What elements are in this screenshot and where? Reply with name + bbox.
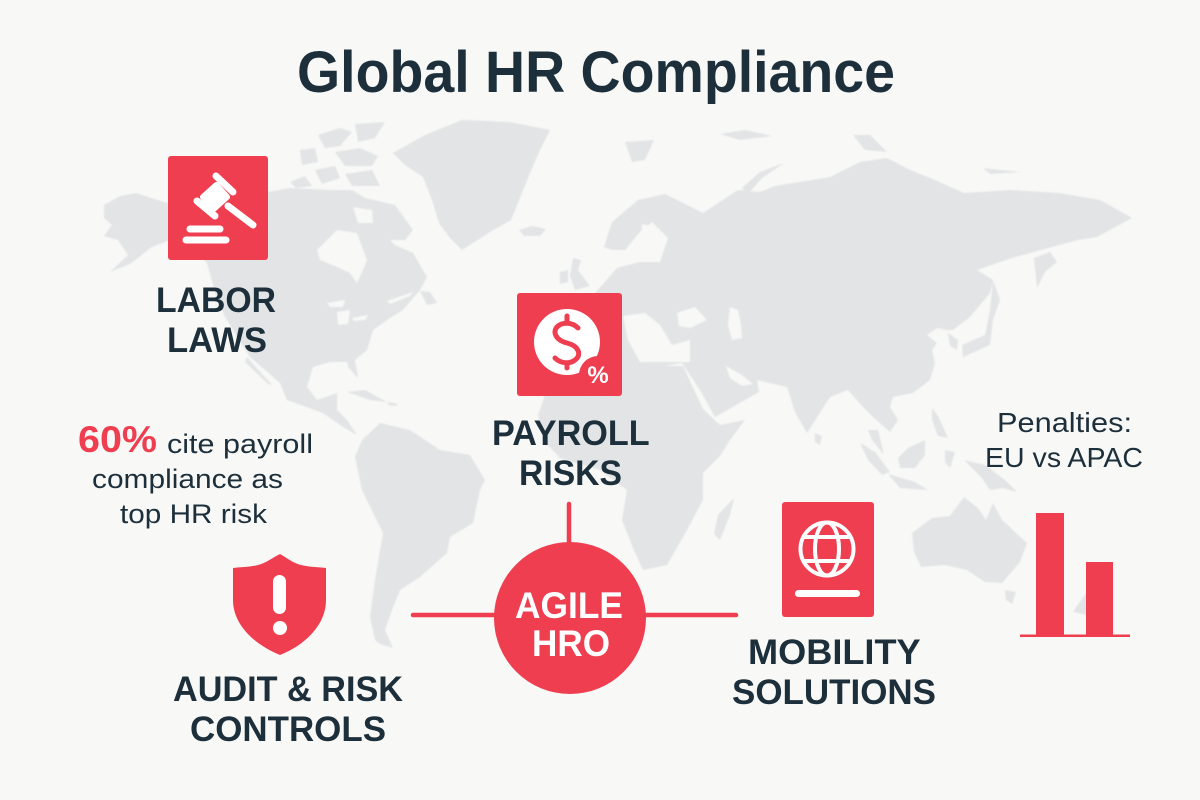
callout: 60% statistic: cite payroll [167,429,313,459]
icon: passport globe [782,502,874,617]
icon: payroll dollar percent: % [587,362,609,389]
chart heading: Penalties: [997,407,1132,438]
label: audit and risk controls: AUDIT & RISK [173,670,403,709]
label: audit and risk controls: CONTROLS [190,710,386,749]
callout: 60% statistic: 60% [78,419,157,460]
callout: 60% statistic: compliance as [92,464,283,494]
connector lines [413,504,736,615]
label: mobility solutions: SOLUTIONS [732,673,936,712]
label: payroll risks: RISKS [519,454,622,493]
icon: shield [233,554,326,655]
panel: audit and risk controls [173,554,413,749]
callout: 60% statistic [78,419,313,529]
label: labor laws: LAWS [167,321,267,360]
panel: mobility solutions [732,502,936,712]
title: Global HR Compliance [297,40,895,105]
label: mobility solutions: MOBILITY [748,633,920,672]
icon: gavel [168,156,268,260]
label: payroll risks: PAYROLL [492,414,649,453]
chart heading: EU vs APAC [985,442,1143,473]
label: labor laws: LABOR [156,281,276,320]
hub label: AGILE [515,585,623,626]
bar chart [1020,513,1130,637]
world map background [104,120,1132,648]
icon: payroll dollar percent [517,293,622,396]
hub label: HRO [532,623,610,664]
hub circle [494,542,646,694]
hub: agile hro with connectors [413,504,736,694]
panel: penalties chart [985,407,1143,637]
panel: labor laws [156,156,286,360]
panel: payroll risks [492,293,659,493]
callout: 60% statistic: top HR risk [120,499,268,529]
